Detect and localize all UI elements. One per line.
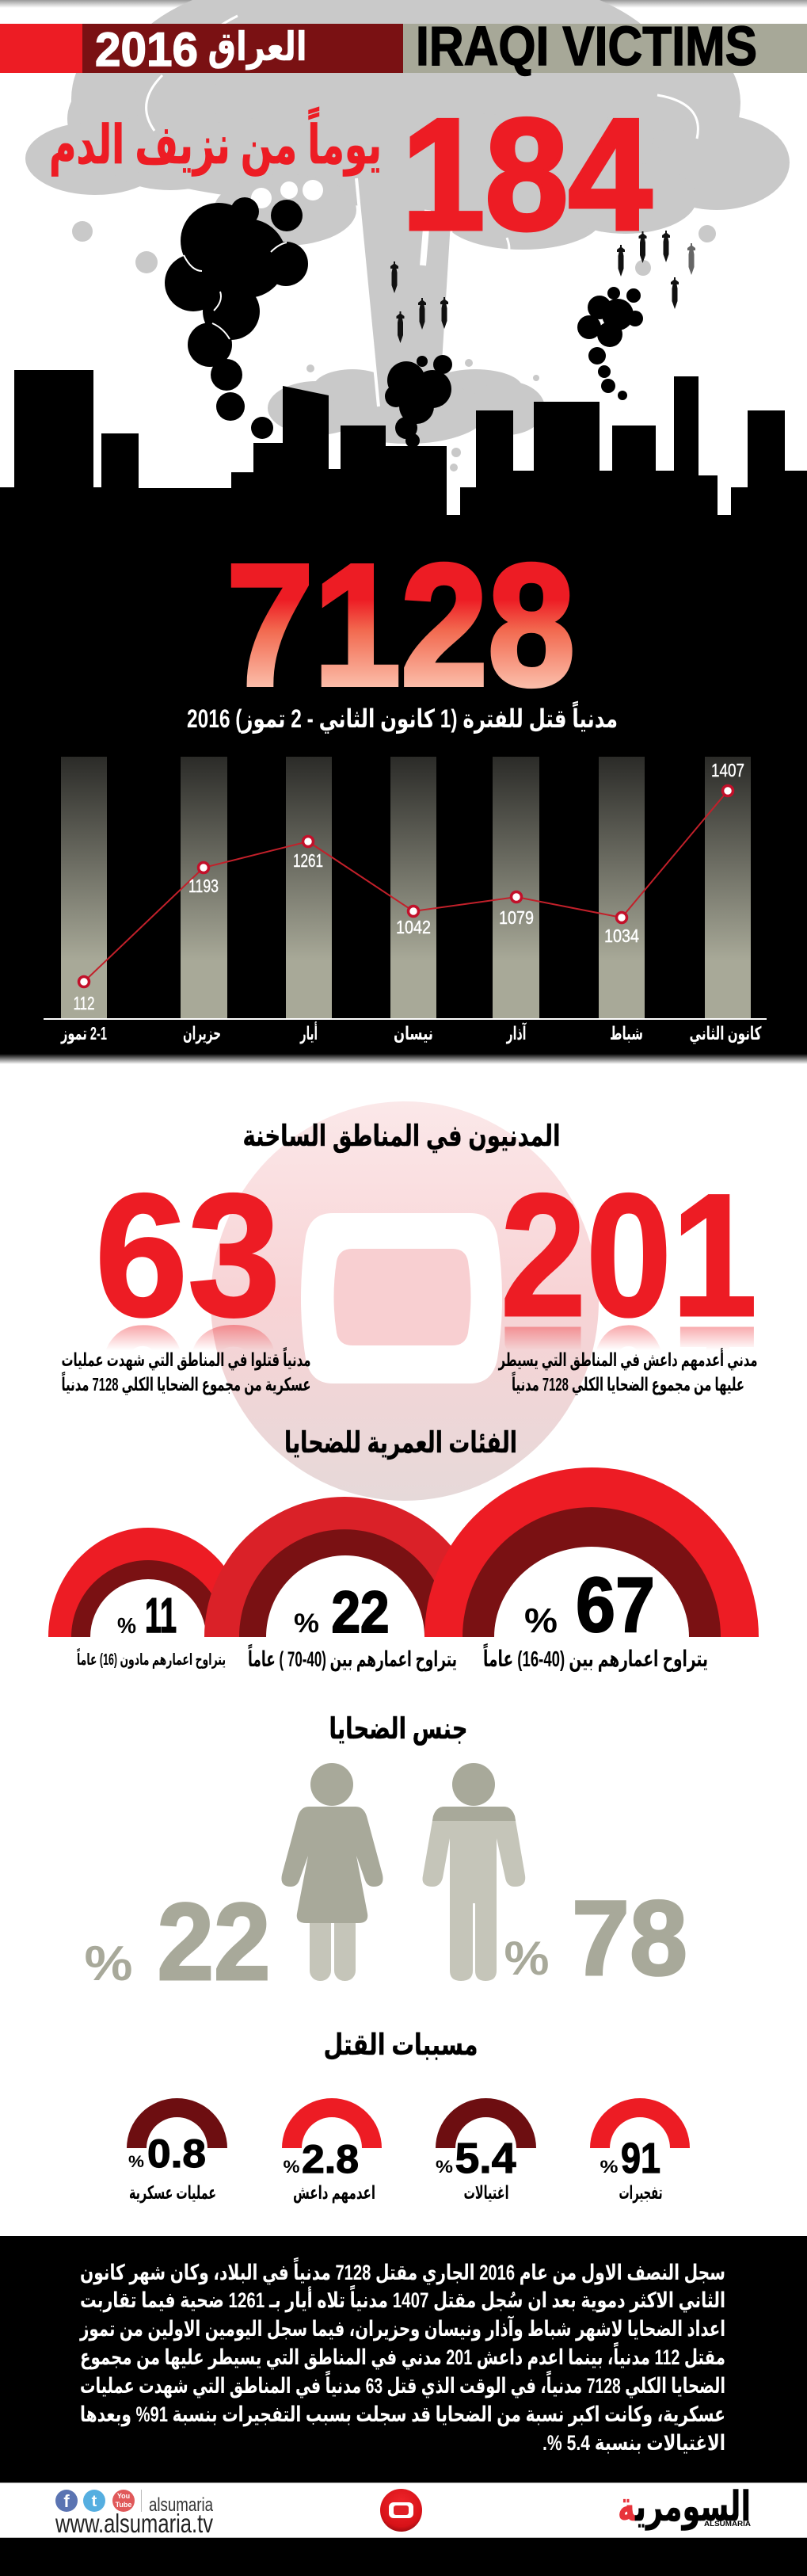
black smoke left [165,197,308,439]
chart month labels: 2-1 تموز [60,1023,107,1044]
summary paragraph: سجل النصف الاول من عام 2016 الجاري مقتل 7128 مدنياً في البلاد، وكان شهر كانون [80,2257,725,2285]
header title arabic word: العراق [207,25,307,71]
smoke highlight lines [184,242,287,339]
header year: 2016 [95,23,198,76]
icon youtube: Tube [116,2501,131,2509]
gender percent values: 22 [157,1881,271,2003]
icon man [423,1763,525,1981]
cause gauge military operations: % [128,2153,144,2171]
age arch small 11 percent [48,1528,248,1637]
social divider [141,2490,142,2512]
caption for 63: عسكرية من مجموع الضحايا الكلي 7128 مدنياً [62,1372,310,1395]
age percent values [117,1561,655,1648]
age percent values: 22 [331,1579,390,1645]
alsumaria center logo [380,2489,422,2532]
header khaki block [403,24,807,73]
falling bombs [390,231,695,343]
icon facebook: f [63,2491,70,2511]
chart values: 112 [73,993,95,1013]
city skyline silhouette [0,370,807,1054]
age labels [77,1643,708,1672]
bottom black band [0,2538,807,2576]
big number 184: 184 [402,86,652,263]
cause gauge isis executions: % [284,2157,299,2177]
cause gauge military operations: 0.8 [147,2131,206,2176]
black smoke right [577,287,643,400]
age labels: يتراوح اعمارهم مادون (16) عاماً [77,1648,226,1669]
chart month labels: نيسان [394,1023,433,1044]
summary paragraph: مقتل 112 مدنياً، بينما اعدم داعش 201 مدني في المناطق التي يسيطر عليها من مجموع [80,2341,725,2370]
chart month labels: حزيران [183,1023,221,1044]
chart subtitle: مدنياً قتل للفترة (1 كانون الثاني - 2 تموز) 2016 [187,700,618,734]
header dark red block [82,24,403,73]
icon facebook [55,2490,78,2512]
cause gauge isis executions: اعدمهم داعش [293,2182,375,2204]
footer bar [0,2483,807,2538]
cause gauge military operations [127,2098,227,2204]
chart values: 1079 [499,907,534,928]
mushroom cloud illustration [25,0,790,477]
cause gauge assassinations: اغتيالات [464,2182,508,2203]
cause gauge assassinations [436,2098,536,2203]
chart values: 1261 [293,850,323,871]
icon twitter: t [92,2493,97,2510]
alsumaria wordmark: السومرية [618,2484,751,2531]
heading causes of death: مسببات القتل [323,2028,478,2061]
chart month labels: آذار [506,1021,527,1044]
gender percent values: % [504,1932,550,1985]
monthly victims chart [44,757,767,1044]
big number 201: 201 [501,1158,757,1353]
icon woman [281,1763,383,1981]
top gray strip [0,0,807,8]
heading gender: جنس الضحايا [329,1712,467,1746]
alsumaria wordmark: ALSUMARIA [704,2520,752,2528]
cause gauge assassinations: % [436,2157,453,2177]
icon twitter [83,2490,105,2512]
icon youtube [112,2490,135,2512]
alsumaria background logo [211,1101,599,1501]
header red block [0,24,82,73]
reflections of numbers: 201 [501,1291,757,1486]
age percent values: % [524,1601,558,1640]
big number 63: 63 [95,1158,280,1353]
black smoke middle [385,355,452,448]
gender percent values [84,1880,687,2003]
summary text panel [0,2236,807,2483]
age arch large 67 percent [424,1467,759,1637]
cloud highlight lines [147,16,698,406]
summary paragraph: الضحايا الكلي 7128 مدنياً، في الوقت الذي قتل 63 مدنياً في المناطق التي شهدت عمليات [80,2370,725,2399]
cause gauge bombings [590,2098,690,2204]
chart points [79,786,733,987]
icon youtube: You [117,2492,130,2500]
cause gauge isis executions: 2.8 [302,2137,359,2181]
header title english: IRAQI VICTIMS [416,15,757,77]
age percent values: 67 [576,1561,655,1648]
chart month labels: أيار [299,1021,318,1044]
age percent values: % [117,1613,136,1638]
chart values: 1034 [604,925,639,946]
summary paragraph: الاغتيالات بنسبة 5.4 %. [542,2431,725,2455]
cause gauge bombings: % [600,2157,618,2177]
chart values: 1193 [188,876,219,896]
summary paragraph [79,2257,725,2455]
chart month labels: شباط [610,1023,643,1044]
heading hot zones: المدنيون في المناطق الساخنة [242,1120,561,1153]
chart axis [44,1018,767,1020]
chart values [73,760,744,1013]
chart month labels [60,1021,762,1044]
age percent values: % [294,1609,319,1639]
website url: www.alsumaria.tv [55,2509,213,2538]
chart bars [61,757,751,1018]
cause gauge bombings: 91 [621,2135,660,2182]
black panel fade out [0,1054,807,1064]
summary paragraph: الثاني الاكثر دموية بعد ان سُجل مقتل 1407 مدنياً تلاه أيار بـ 1261 ضحية فيما تقاربت [80,2284,725,2313]
cause gauge military operations: عمليات عسكرية [129,2182,216,2204]
reflections of numbers [107,1325,754,1348]
chart line [84,791,728,982]
age labels: يتراوح اعمارهم بين (40-70 ) عاماً [248,1643,457,1672]
age arch medium 22 percent [204,1497,485,1637]
caption for 201 [498,1347,757,1395]
age percent values: 11 [145,1589,177,1643]
chart month labels: كانون الثاني [689,1023,762,1044]
heading age groups: الفئات العمرية للضحايا [284,1426,517,1460]
caption for 63 [62,1347,310,1395]
subtitle days of bloodshed: يوماً من نزيف الدم [49,106,382,177]
cause gauge bombings: تفجيرات [619,2182,662,2204]
chart values: 1042 [396,917,431,937]
gender percent values: % [84,1937,133,1991]
cause gauge isis executions [282,2098,382,2204]
age labels: يتراوح اعمارهم بين (40-16) عاماً [483,1643,708,1672]
big number 7128: 7128 [226,529,575,722]
cause gauge assassinations: 5.4 [455,2135,516,2182]
chart values: 1407 [711,760,744,780]
reflections of numbers: 63 [95,1291,280,1486]
caption for 63: مدنياً قتلوا في المناطق التي شهدت عمليات [62,1347,310,1371]
header bar [0,24,807,73]
social handle: alsumaria [149,2494,214,2516]
gender percent values: 78 [572,1880,687,1998]
